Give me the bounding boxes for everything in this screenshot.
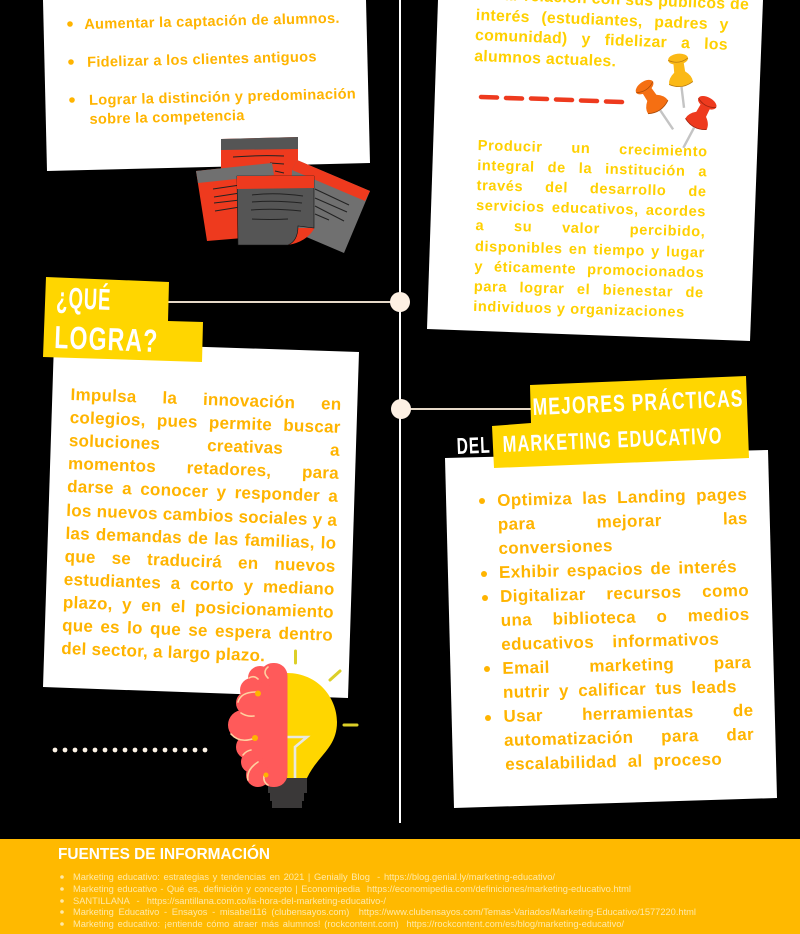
dashed red line: [481, 97, 622, 102]
footer sources list: SANTILLANA - https://santillana.com.co/la-hora-del-marketing-educativo-/: [73, 896, 386, 906]
text block: mejores practicas list: Digitalizar recursos como: [500, 581, 749, 606]
heading: logra: LOGRA?: [54, 319, 159, 359]
panel: que logra: [43, 342, 359, 698]
text block: impulsa la innovacion: del sector, a largo plazo.: [61, 639, 265, 665]
text block: objetivos list: Fidelizar a los clientes antiguos: [87, 49, 317, 71]
heading: que: ¿QUÉ: [56, 281, 112, 317]
connector: mejores practicas: [401, 408, 532, 410]
timeline node lower: [391, 399, 411, 419]
text block: mejores practicas list: nutrir y calificar tus leads: [503, 677, 737, 702]
text block: mejores practicas list: para mejorar las: [498, 509, 748, 534]
text block: crecimiento integral: integral de la institución a: [477, 158, 707, 181]
text block: objetivos list: Lograr la distinción y predominación: [89, 86, 356, 109]
panel: objetivos top left: [43, 0, 370, 171]
text block: mejores practicas list: escalabilidad al proceso: [505, 750, 722, 774]
heading background: mejores practicas: [492, 376, 749, 468]
text block: impulsa la innovacion: que es lo que se espera dentro: [62, 616, 333, 645]
dotted line: [53, 748, 207, 752]
text block: objetivos list: Aumentar la captación de alumnos.: [84, 11, 340, 33]
panel: mejores practicas: [445, 450, 777, 808]
footer sources list: Marketing educativo: ¡entiende cómo atraer más alumnos! (rockcontent.com) https://rockcontent.com/es/blog/marketing-educativo/: [73, 919, 624, 929]
text block: publicos de interes: alumnos actuales.: [474, 48, 617, 70]
text block: mejores practicas list: Usar herramientas de: [503, 701, 754, 726]
text block: impulsa la innovacion: las demandas de las familias, lo: [65, 524, 337, 552]
text block: mejores practicas list: educativos informativos: [501, 630, 719, 654]
icon: push pins: [632, 52, 720, 153]
text block: impulsa la innovacion: [61, 385, 342, 665]
text block: crecimiento integral: y éticamente promocionados: [474, 259, 705, 281]
footer sources list: Marketing educativo - Qué es, definición y concepto | Economipedia https://economipedia.com/definiciones/marketing-educativo.html: [73, 884, 631, 894]
footer heading: FUENTES DE INFORMACIÓN: [58, 846, 270, 863]
footer sources list: Marketing educativo: estrategias y tendencias en 2021 | Genially Blog - https://blog.genial.ly/marketing-educativo/: [73, 872, 555, 882]
text block: impulsa la innovacion: que se traducirá en nuevos: [64, 547, 336, 575]
text block: crecimiento integral: a su valor percibido,: [475, 218, 706, 241]
text block: crecimiento integral: disponibles en tiempo y lugar: [475, 238, 705, 261]
text block: crecimiento integral: individuos y organizaciones: [473, 299, 685, 321]
text block: crecimiento integral: para lograr el bienestar de: [474, 279, 704, 301]
text block: impulsa la innovacion: soluciones creativas a: [69, 431, 340, 460]
footer: fuentes de informacion: [0, 839, 800, 934]
timeline vertical line: [399, 0, 401, 823]
text block: impulsa la innovacion: momentos retadores, para: [68, 454, 339, 483]
text block: impulsa la innovacion: los nuevos cambios sociales y a: [66, 500, 338, 529]
text block: impulsa la innovacion: plazo, y en el posicionamiento: [63, 593, 334, 622]
text block: impulsa la innovacion: colegios, pues permite buscar: [69, 408, 341, 437]
heading background: que logra: [43, 277, 203, 362]
text block: impulsa la innovacion: darse a conocer y responder a: [67, 477, 338, 506]
text block: impulsa la innovacion: Impulsa la innovación en: [70, 385, 342, 414]
footer sources list: [60, 872, 696, 929]
text block: publicos de interes: [474, 0, 749, 70]
text block: mejores practicas list: Optimiza las Landing pages: [497, 485, 747, 510]
text block: objetivos list: sobre la competencia: [89, 108, 245, 128]
text block: publicos de interes: interés (estudiantes, padres y: [476, 7, 729, 33]
text block: objetivos list: [84, 11, 356, 128]
text block: mejores practicas list: [497, 485, 754, 774]
text block: crecimiento integral: través del desarrollo de: [476, 178, 707, 201]
panel: top right: [427, 0, 763, 341]
text block: mejores practicas list: Email marketing para: [502, 653, 752, 678]
text block: mejores practicas list: Exhibir espacios de interés: [499, 557, 737, 582]
icon: sticky notes: [196, 137, 370, 253]
text block: crecimiento integral: Producir un crecimiento: [478, 138, 708, 160]
text block: crecimiento integral: servicios educativos, acordes: [476, 198, 706, 221]
footer sources list: Marketing Educativo - Ensayos - misabel116 (clubensayos.com) https://www.clubensayos.com/Temas-Variados/Marketing-Educativo/1577220.html: [73, 907, 696, 917]
text block: publicos de interes: comunidad) y fidelizar a los: [475, 27, 728, 54]
heading: del: DEL: [456, 432, 491, 459]
text block: mejores practicas list: conversiones: [498, 536, 613, 558]
text block: mejores practicas list: automatización para dar: [504, 725, 754, 750]
text block: impulsa la innovacion: estudiantes a corto y mediano: [63, 570, 335, 599]
text block: mejores practicas list: una biblioteca o medios: [500, 605, 750, 630]
connector: que logra: [168, 301, 400, 303]
timeline node upper: [390, 292, 410, 312]
text block: crecimiento integral: [473, 138, 708, 321]
